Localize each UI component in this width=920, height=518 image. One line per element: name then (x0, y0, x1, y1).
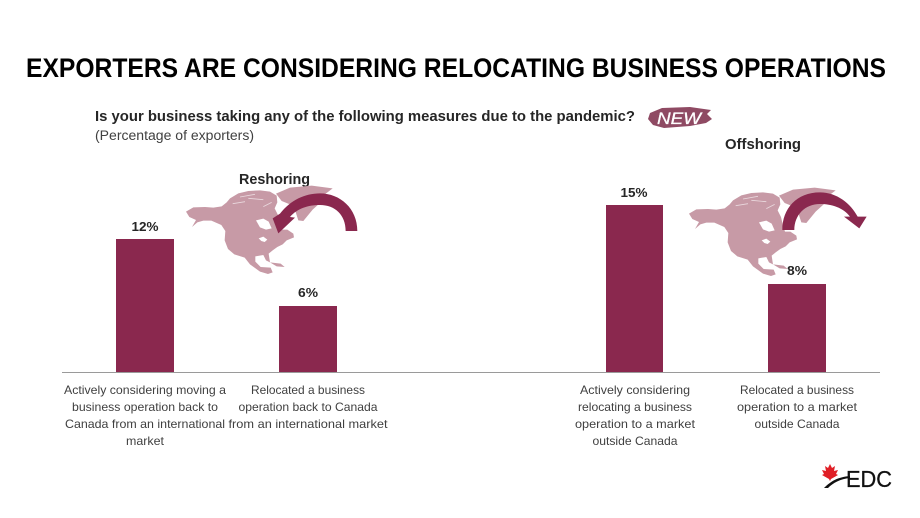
label: actively considering relocating: relocating a business (578, 400, 692, 414)
label: relocated back to Canada: Relocated a business (251, 383, 365, 397)
subtitle: percentage of exporters: (Percentage of exporters) (95, 128, 254, 143)
label: relocated back to Canada: from an international market (228, 417, 388, 431)
label: actively considering relocating (575, 383, 696, 448)
label: relocated outside Canada: operation to a market (737, 400, 858, 414)
label: actively considering relocating: Actively considering (580, 383, 690, 397)
badge: new (648, 107, 712, 128)
bar: relocated back 6%: 6% (298, 285, 318, 300)
label: relocated back to Canada: operation back to Canada (238, 400, 378, 414)
arrow: offshoring (782, 192, 867, 230)
bar: relocated outside 8% (768, 263, 826, 372)
bar: considering moving back 12% (116, 219, 174, 372)
label: relocated back to Canada (228, 383, 388, 431)
icon: north america map, offshoring (689, 188, 836, 276)
bar: considering relocating 15% (606, 185, 663, 372)
bar: relocated back 6% (279, 285, 337, 372)
label: actively considering moving back (64, 383, 226, 448)
label: actively considering moving back: Canada from an international (65, 417, 225, 431)
label: relocated outside Canada (737, 383, 858, 431)
label: actively considering relocating: outside Canada (592, 434, 678, 448)
icon: north america map, reshoring (186, 186, 333, 274)
label: actively considering moving back: Actively considering moving a (64, 383, 226, 397)
survey question: Is your business taking any of the following measures due to the pandemic? (95, 109, 635, 125)
logo: EDC: EDC (846, 466, 892, 492)
logo: EDC (822, 464, 892, 492)
heading: reshoring: Reshoring (239, 172, 310, 188)
bar: considering moving back 12%: 12% (132, 219, 159, 234)
label: actively considering moving back: market (126, 434, 165, 448)
label: actively considering relocating: operation to a market (575, 417, 696, 431)
axis line (62, 372, 880, 373)
label: actively considering moving back: business operation back to (72, 400, 218, 414)
arrow: reshoring (273, 193, 357, 233)
badge: new: NEW (657, 109, 703, 128)
bar: relocated outside 8%: 8% (787, 263, 807, 278)
bar: considering relocating 15%: 15% (620, 185, 648, 200)
bar chart (62, 185, 880, 373)
label: relocated outside Canada: outside Canada (754, 417, 840, 431)
heading: offshoring: Offshoring (725, 137, 801, 153)
label: relocated outside Canada: Relocated a business (740, 383, 854, 397)
